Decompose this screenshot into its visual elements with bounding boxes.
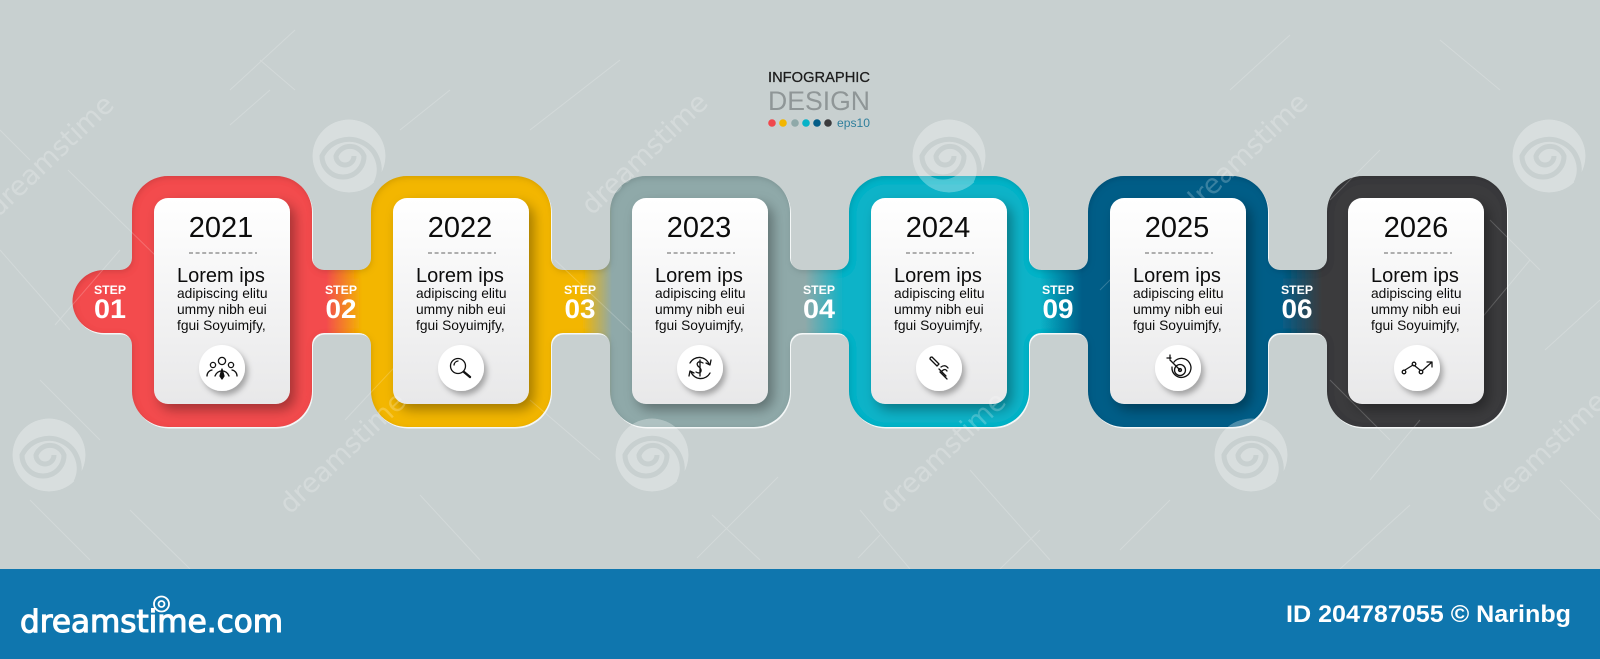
step badge 06: 06 — [1282, 294, 1312, 324]
body text: adipiscing elitu — [416, 286, 507, 301]
body text: Lorem ips — [894, 265, 982, 287]
palette dots — [768, 119, 832, 127]
panel: 2021 — [154, 198, 290, 404]
icon: line chart — [1394, 345, 1440, 391]
body text: ummy nibh eui — [1133, 302, 1223, 317]
step badge 04 — [803, 283, 835, 324]
body text: ummy nibh eui — [894, 302, 984, 317]
watermark text: dreamstime — [873, 386, 1012, 520]
step badge 01: 01 — [94, 294, 126, 324]
body text: fgui Soyuimjfy, — [177, 318, 266, 333]
panel: 2023 — [632, 198, 768, 404]
icon: exchange — [677, 345, 723, 391]
brand logo: dreamstime.com — [20, 604, 283, 640]
step badge 01 — [94, 283, 126, 324]
timeline ribbon — [60, 170, 1512, 432]
step badge 09 — [1042, 283, 1074, 324]
year: 2021 — [189, 212, 253, 244]
footer banner — [0, 569, 1600, 659]
step badge 01: STEP — [94, 283, 126, 297]
icon: magnifier — [438, 345, 484, 391]
year: 2023 — [667, 212, 731, 244]
image id and author: ID 204787055 © Narinbg — [1286, 601, 1571, 628]
panel: 2024 — [871, 198, 1007, 404]
icon: target — [1155, 345, 1201, 391]
step badge 04: 04 — [803, 294, 835, 324]
title — [768, 70, 870, 130]
year: 2025 — [1145, 212, 1209, 244]
step badge 04: STEP — [803, 283, 835, 297]
title: DESIGN — [768, 86, 870, 116]
body text: Lorem ips — [655, 265, 743, 287]
body text: adipiscing elitu — [1133, 286, 1224, 301]
body text: adipiscing elitu — [894, 286, 985, 301]
body text: Lorem ips — [416, 265, 504, 287]
panel: 2025 — [1110, 198, 1246, 404]
year: 2024 — [906, 212, 970, 244]
title: INFOGRAPHIC — [768, 70, 870, 86]
watermark text: dreamstime — [1175, 87, 1314, 221]
body text — [1133, 265, 1224, 333]
body text: Lorem ips — [1133, 265, 1221, 287]
body text: ummy nibh eui — [416, 302, 506, 317]
body text: adipiscing elitu — [1371, 286, 1462, 301]
body text: fgui Soyuimjfy, — [894, 318, 983, 333]
body text: Lorem ips — [1371, 265, 1459, 287]
step badge 06: STEP — [1281, 283, 1313, 297]
step badge 09: STEP — [1042, 283, 1074, 297]
body text: fgui Soyuimjfy, — [1371, 318, 1460, 333]
highlight edge — [74, 178, 1508, 428]
body text: fgui Soyuimjfy, — [1133, 318, 1222, 333]
panel: 2022 — [393, 198, 529, 404]
year: 2026 — [1384, 212, 1448, 244]
step badge 02 — [325, 283, 357, 324]
body text: fgui Soyuimjfy, — [416, 318, 505, 333]
icon: people — [199, 345, 245, 391]
step badge 02: 02 — [326, 294, 356, 324]
body text: adipiscing elitu — [177, 286, 268, 301]
year: 2022 — [428, 212, 492, 244]
watermark text: dreamstime — [575, 87, 714, 221]
coloured band — [60, 170, 1512, 432]
panel: 2026 — [1348, 198, 1484, 404]
watermark text — [0, 87, 1600, 520]
icon: broken link — [916, 345, 962, 391]
body text — [1371, 265, 1462, 333]
body text — [177, 265, 268, 333]
body text: fgui Soyuimjfy, — [655, 318, 744, 333]
body text — [655, 265, 746, 333]
step badge 06 — [1281, 283, 1313, 324]
body text: ummy nibh eui — [177, 302, 267, 317]
step badge 09: 09 — [1042, 294, 1074, 324]
watermark text: dreamstime — [273, 386, 412, 520]
step badge 02: STEP — [325, 283, 357, 297]
watermark spirals — [12, 120, 1586, 492]
body text: ummy nibh eui — [655, 302, 745, 317]
body text: Lorem ips — [177, 265, 265, 287]
body text — [894, 265, 985, 333]
body text: adipiscing elitu — [655, 286, 746, 301]
step badge 03 — [564, 283, 596, 324]
body text: ummy nibh eui — [1371, 302, 1461, 317]
title: eps10 — [837, 116, 870, 130]
step badge 03: STEP — [564, 283, 596, 297]
step badge 03: 03 — [564, 294, 596, 324]
body text — [416, 265, 507, 333]
